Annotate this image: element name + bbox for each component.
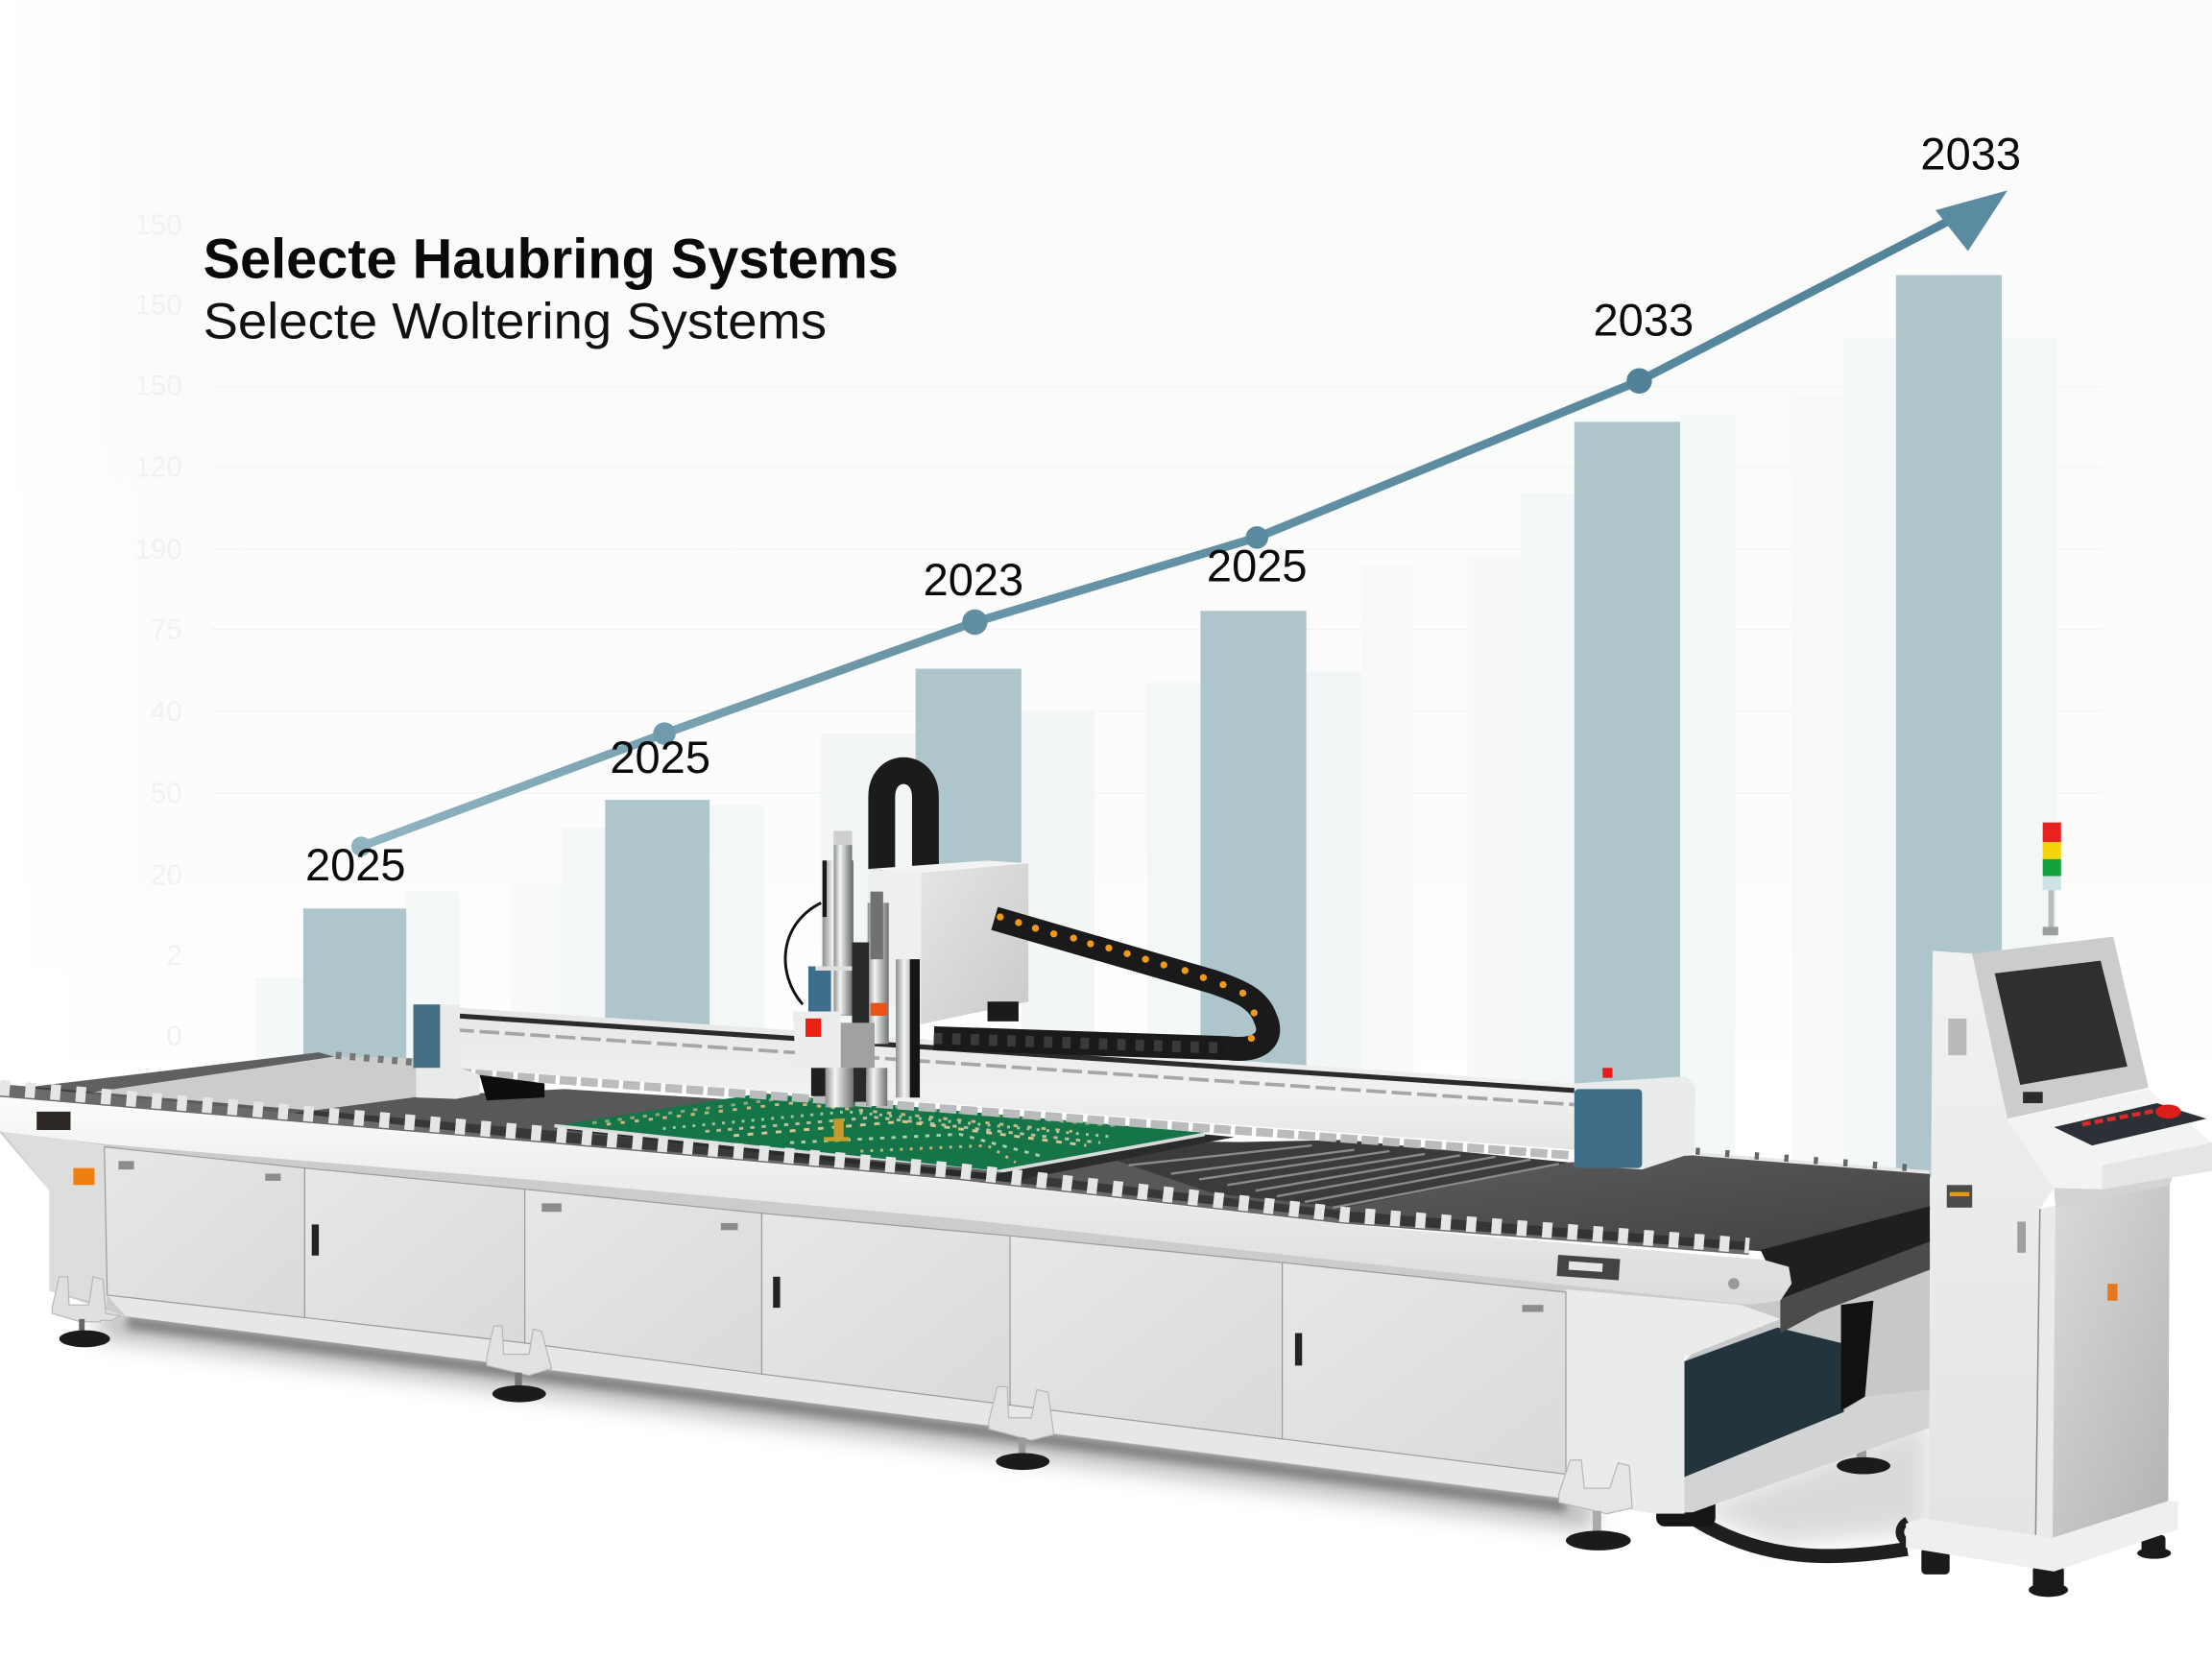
faint y-axis labels: 120 [135,452,182,484]
blue sensor block [808,967,830,1012]
upper guide rail [454,1016,1575,1091]
chrome rail [454,1030,1575,1105]
roller mechanism [1780,1238,1930,1334]
foot 4 [1559,1460,1632,1551]
cabinet door 6 [1283,1262,1566,1475]
left end block front [414,1004,440,1068]
year labels: 2025 [1207,540,1308,590]
cabinet door 5 [1010,1236,1283,1439]
year labels [305,128,2021,890]
faint y-axis labels: 2 [166,940,182,972]
foot 3 [989,1386,1054,1470]
lead screw [1841,1301,1873,1410]
collar [815,967,866,971]
faint y-axis labels: 190 [135,534,182,565]
orange valve [871,1003,887,1016]
gantry beam [454,1007,1575,1150]
faint y-axis labels: 75 [151,614,182,646]
faint y-axis labels: 150 [135,370,182,401]
trend arrow [351,190,2008,856]
cabinet door 2 [304,1168,525,1343]
dark streak zone [1072,1140,1569,1208]
floor hose [1656,1490,1908,1556]
foot 2 [487,1326,552,1403]
year labels: 2033 [1594,295,1694,346]
main bar chart [303,276,2002,1178]
control cabinet [1906,823,2212,1597]
faint y-axis labels: 150 [135,290,182,322]
cabinet base [1906,1501,2178,1572]
orange chain markers [997,913,1258,1042]
cabinet door [2035,1182,2170,1538]
faint y-axis labels [135,209,182,1052]
heading: Selecte Haubring Systems [204,228,899,290]
machine body [0,1115,1780,1514]
pale background bars [255,339,2056,1185]
stack light [2043,823,2061,935]
screen label [2023,1092,2043,1103]
rail data plate [1556,1255,1620,1280]
chart gridlines [211,387,2102,793]
drag chain arch [881,771,926,871]
door edge strip [2035,1206,2056,1538]
door latches [118,1161,1544,1312]
operator desk front [2102,1142,2212,1190]
faint y-axis labels: 20 [151,859,182,891]
lower rail [454,1072,1572,1155]
machine right underside [1656,1224,1930,1514]
gantry shadow [480,1075,544,1100]
faint y-axis labels: 150 [135,209,182,241]
amber status panel [1947,1185,1972,1208]
chrome drive column [896,959,920,1097]
year labels: 2025 [610,732,710,782]
door handles [312,1224,1302,1365]
rear belt strip and plate [24,1052,416,1113]
subheading: Selecte Woltering Systems [204,294,827,350]
cabinet door 3 [525,1190,761,1374]
rear pins left [336,1055,414,1062]
spindle [833,830,853,1014]
dark middle block [853,943,869,1076]
gantry [414,1004,1695,1169]
orange warning label [73,1168,94,1185]
emergency stop [2155,1105,2181,1118]
conveyor belt [294,1089,1930,1298]
leveling feet and brackets [52,1277,1632,1551]
carriage box [868,860,1028,1024]
faint y-axis labels: 40 [151,696,182,728]
faint y-axis labels: 50 [151,778,182,809]
right end blue face [1575,1089,1642,1168]
rear foot [1837,1439,1890,1475]
cabinet feet [1921,1535,2171,1597]
year labels: 2033 [1920,128,2021,179]
machine floor shadow [99,1310,1930,1545]
lower spindles [811,1068,829,1096]
red status lamp [1602,1068,1613,1078]
side labels [1948,1019,1966,1055]
blue service panel [1684,1328,1843,1477]
circuit board [554,1094,1235,1182]
horizontal drag chain [934,913,1268,1048]
tool head [785,830,920,1142]
underframe beam [1656,1389,1930,1514]
rail end hole [1728,1278,1740,1289]
front rail pins [0,1088,1749,1248]
orange door tag [2107,1284,2118,1301]
cabinet left side [1929,950,2054,1535]
door latch [2017,1221,2026,1253]
corner housing [1566,1289,1780,1514]
foot 1 [52,1277,120,1347]
year labels: 2023 [924,554,1023,605]
rear pins right [1695,1154,1930,1172]
board traces [592,1097,1115,1163]
operator desk top [2008,1089,2212,1166]
side column [868,902,889,1044]
plinth [108,1295,1566,1498]
monitor panel [1972,937,2149,1118]
right end white housing [1575,1076,1695,1169]
keypad [2054,1103,2206,1145]
cabinet door 4 [761,1214,1010,1406]
belt end roller [1761,1206,1930,1298]
gold nozzle [833,1118,844,1140]
year labels: 2025 [305,839,406,890]
under desk shadow [2054,1176,2173,1208]
board front edge [554,1126,1205,1172]
sensor cable [785,902,821,1004]
left end block side [416,1004,480,1099]
chain links [934,1038,1227,1048]
title block [204,228,899,350]
faint y-axis labels: 0 [166,1021,182,1052]
left frame [0,1129,108,1305]
red marker [805,1019,821,1037]
monitor screen [1995,961,2128,1085]
front rail [0,1097,1791,1305]
belt streaks [1129,1145,1559,1208]
cabinet door 1 [105,1147,304,1317]
left rail plate [36,1112,70,1130]
white head block [793,1012,875,1070]
red keys [2082,1110,2158,1124]
rear column [823,860,854,1016]
